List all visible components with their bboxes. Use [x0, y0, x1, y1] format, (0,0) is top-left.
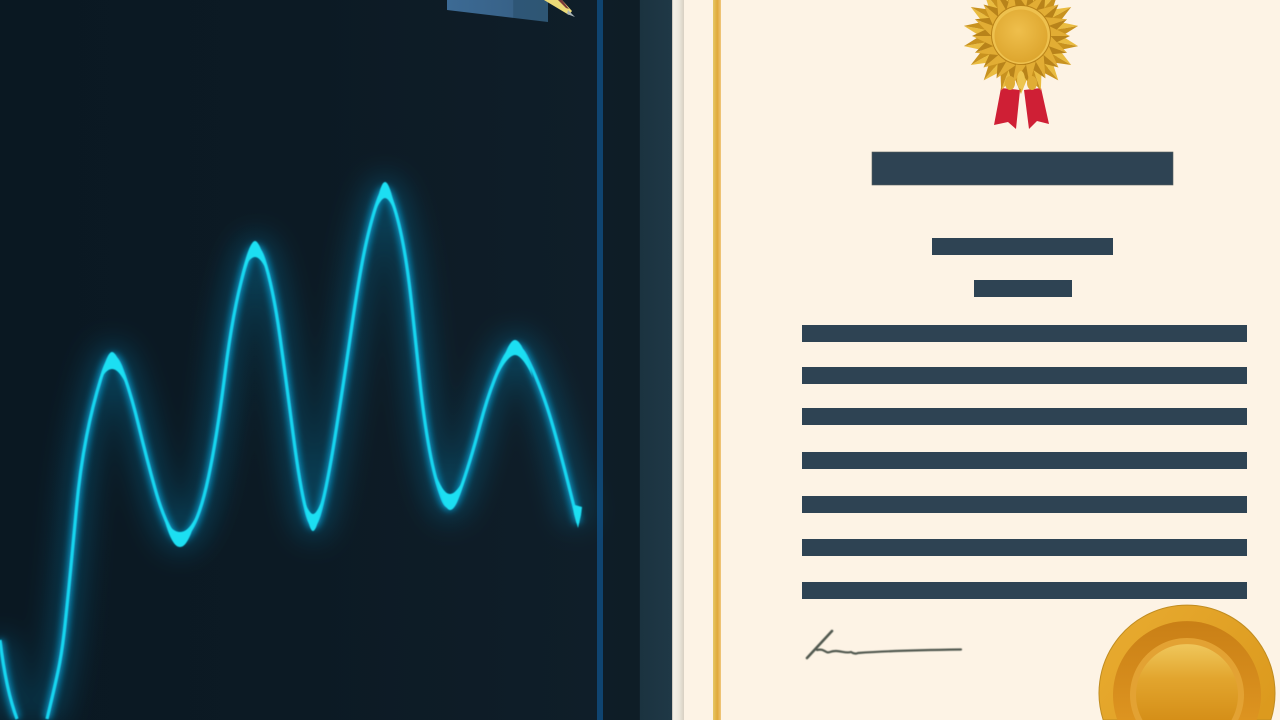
rosette knobs [1005, 76, 1015, 90]
icon: gold wax seal [1099, 605, 1275, 720]
certificate left edge [672, 0, 684, 720]
ribbon left [994, 88, 1020, 129]
icon: blue notebook corner [447, 0, 548, 22]
rosette centre [994, 10, 1048, 62]
panel: certificate paper [672, 0, 1280, 720]
panel: device frame [603, 0, 672, 720]
screen blue edge line [597, 0, 603, 720]
rosette centre ring [991, 5, 1051, 65]
subheading bar [932, 238, 1113, 255]
chart: glowing cyan waveform [0, 182, 582, 719]
ribbon right [1024, 88, 1049, 129]
icon: pencil tip [544, 0, 575, 17]
text block: body lines [802, 325, 1247, 599]
signature [807, 631, 961, 658]
icon: gold rosette with red ribbons [962, 0, 1080, 129]
subheading bar short [974, 280, 1072, 297]
heading bar: certificate title [872, 152, 1173, 185]
panel: dark oscilloscope screen [0, 0, 603, 720]
rosette petals [962, 0, 1080, 95]
certificate gold border line [713, 0, 721, 720]
